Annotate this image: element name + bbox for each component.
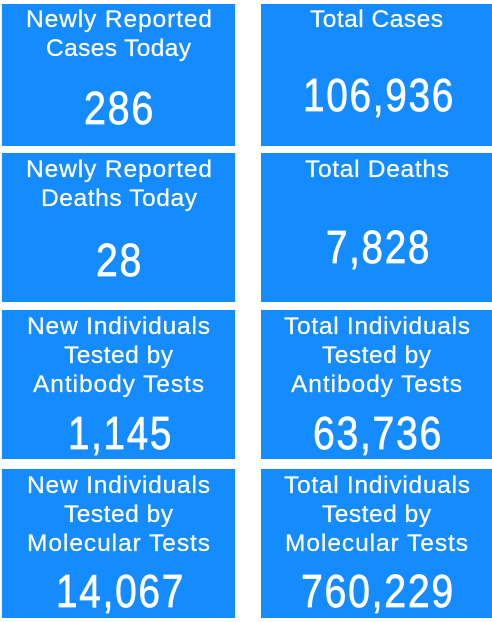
panel: total individuals tested by molecular tests — [261, 469, 492, 618]
panel: total individuals tested by antibody tests — [261, 310, 492, 459]
panel: new individuals tested by antibody tests — [2, 310, 235, 459]
panel: newly reported deaths today: Newly Reported — [26, 156, 212, 183]
panel: total cases — [261, 4, 492, 146]
panel: new individuals tested by antibody tests: 1,145 — [68, 407, 173, 459]
panel: total individuals tested by antibody tests: Total Individuals — [284, 313, 470, 340]
panel: total cases: 106,936 — [303, 69, 455, 121]
panel: total deaths: Total Deaths — [305, 156, 449, 183]
panel: total individuals tested by antibody tests: Tested by — [322, 342, 432, 369]
panel: new individuals tested by molecular tests — [2, 469, 235, 618]
panel: total cases: Total Cases — [310, 6, 443, 33]
panel: new individuals tested by molecular tests: Tested by — [64, 501, 174, 528]
panel: total individuals tested by antibody tests: Antibody Tests — [291, 371, 462, 398]
panel: new individuals tested by antibody tests: Tested by — [64, 342, 174, 369]
panel: new individuals tested by molecular tests: Molecular Tests — [27, 530, 210, 557]
panel: newly reported cases today — [2, 4, 235, 146]
panel: newly reported cases today: Cases Today — [46, 35, 192, 62]
panel: total individuals tested by antibody tests: 63,736 — [313, 407, 443, 459]
panel: new individuals tested by molecular tests: New Individuals — [27, 472, 210, 499]
panel: newly reported deaths today — [2, 153, 235, 302]
panel: new individuals tested by antibody tests: Antibody Tests — [33, 371, 204, 398]
panel: new individuals tested by molecular tests: 14,067 — [56, 565, 185, 617]
panel: total individuals tested by molecular tests: Tested by — [322, 501, 432, 528]
panel: total individuals tested by molecular tests: 760,229 — [301, 565, 455, 617]
panel: total individuals tested by molecular tests: Molecular Tests — [285, 530, 468, 557]
panel: total deaths — [261, 153, 492, 302]
panel: newly reported deaths today: 28 — [96, 234, 143, 286]
panel: new individuals tested by antibody tests: New Individuals — [27, 313, 210, 340]
panel: newly reported cases today: 286 — [84, 82, 155, 134]
panel: total deaths: 7,828 — [326, 221, 431, 273]
panel: newly reported deaths today: Deaths Today — [41, 185, 198, 212]
panel: newly reported cases today: Newly Reported — [26, 6, 212, 33]
panel: total individuals tested by molecular tests: Total Individuals — [284, 472, 470, 499]
